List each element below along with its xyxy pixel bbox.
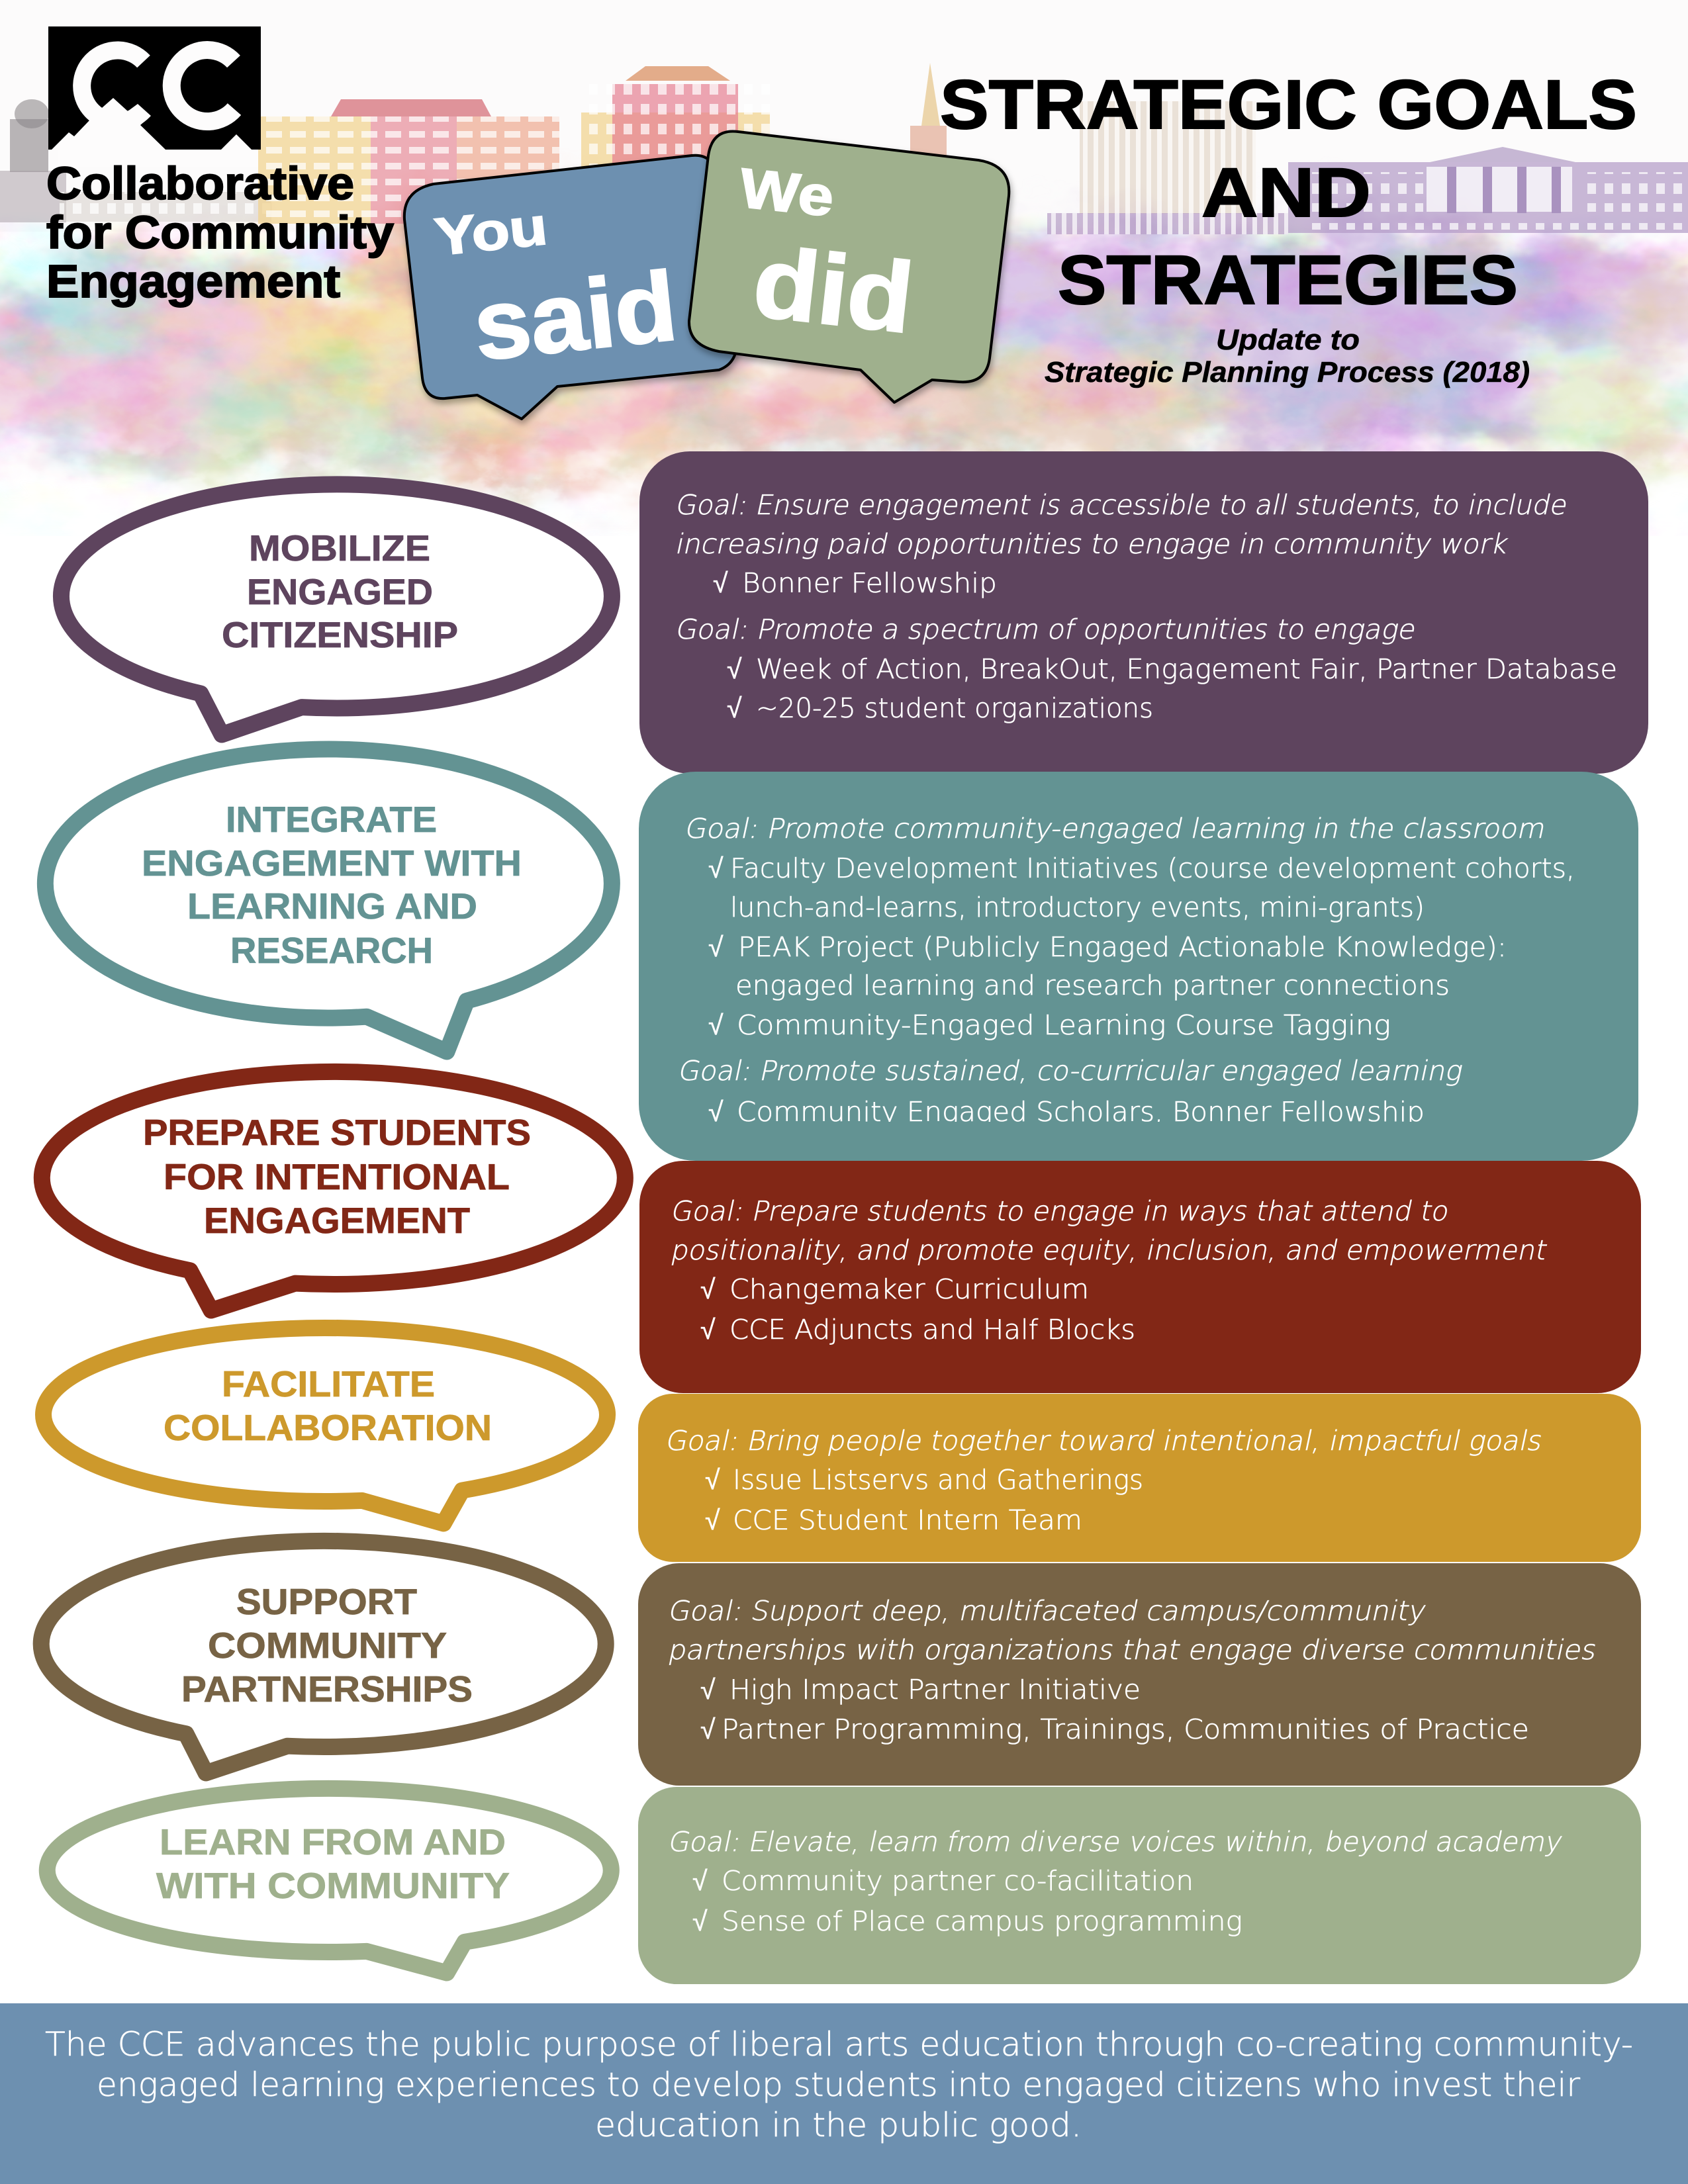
speech bubble: You said: You: [432, 197, 550, 267]
subtitle: [1045, 324, 1530, 388]
logo wordmark: [46, 158, 394, 307]
panel: integrate goals: √: [708, 852, 724, 884]
bubble: integrate engagement: INTEGRATE: [226, 799, 437, 840]
bubble: facilitate collaboration: COLLABORATION: [164, 1407, 492, 1448]
bubble: support community partnerships: COMMUNITY: [208, 1625, 447, 1666]
panel: facilitate goals: [638, 1394, 1641, 1562]
speech bubble: We did: We: [737, 156, 837, 228]
watercolor wash: [0, 218, 1688, 486]
bubble: support community partnerships: [41, 1541, 606, 1773]
bubble: prepare students: [42, 1071, 625, 1310]
panel: mobilize goals: Bonner Fellowship: [742, 567, 997, 599]
title: STRATEGIC GOALS: [940, 66, 1637, 144]
bubble: mobilize engaged citizenship: MOBILIZE: [249, 527, 430, 569]
title: [940, 66, 1637, 319]
panel: support goals: √: [700, 1713, 716, 1745]
logo wordmark: for Community: [46, 206, 394, 258]
panel: mobilize goals: √: [727, 653, 742, 685]
subtitle: Update to: [1216, 324, 1360, 356]
logo: [46, 26, 394, 307]
panel: support goals: High Impact Partner Initiative: [729, 1674, 1141, 1706]
bubble: prepare students: PREPARE STUDENTS: [143, 1112, 531, 1153]
bubble: facilitate collaboration: FACILITATE: [222, 1363, 435, 1404]
panel: learn goals: √: [692, 1865, 708, 1897]
speech bubble: We did: [689, 131, 1009, 402]
panel: prepare goals: Goal: Prepare students to engage in ways that attend to: [669, 1195, 1452, 1227]
panel: mobilize goals: Week of Action, BreakOut, Engagement Fair, Partner Database: [756, 653, 1617, 685]
panel: support goals: [638, 1563, 1641, 1786]
panel: integrate goals: Community-Engaged Learning Course Tagging: [737, 1009, 1391, 1041]
panel: integrate goals: [639, 772, 1638, 1161]
bubble: learn from community: WITH COMMUNITY: [156, 1865, 510, 1906]
bubble: prepare students: ENGAGEMENT: [204, 1200, 470, 1241]
panel: facilitate goals: Issue Listservs and Gatherings: [733, 1464, 1143, 1496]
panel: support goals: Goal: Support deep, multifaceted campus/community: [666, 1595, 1429, 1627]
multicolour paint mottling: [0, 220, 1688, 508]
panel: mobilize goals: √: [727, 692, 742, 724]
panel: prepare goals: Changemaker Curriculum: [729, 1273, 1089, 1305]
panel: integrate goals: Community Engaged Scholars, Bonner Fellowship: [737, 1096, 1425, 1128]
bubble: support community partnerships: PARTNERSHIPS: [181, 1668, 473, 1709]
bubble: prepare students: FOR INTENTIONAL: [164, 1156, 510, 1197]
bubble: mobilize engaged citizenship: CITIZENSHIP: [222, 614, 458, 655]
panel: learn goals: √: [692, 1905, 708, 1937]
panel: integrate goals: engaged learning and research partner connections: [735, 970, 1450, 1001]
panel: mobilize goals: √: [713, 567, 728, 599]
panel: integrate goals: Goal: Promote sustained, co-curricular engaged learning: [676, 1055, 1466, 1087]
speech bubble: We did: did: [748, 226, 919, 354]
panel: facilitate goals: √: [705, 1504, 720, 1536]
speech bubble: You said: said: [469, 251, 682, 381]
logo mark: [48, 26, 261, 167]
panel: integrate goals: √: [708, 1009, 724, 1041]
panel: integrate goals: Goal: Promote community-engaged learning in the classroom: [682, 813, 1549, 844]
bubble: mobilize engaged citizenship: [61, 484, 612, 735]
panel: integrate goals: lunch-and-learns, introductory events, mini-grants): [730, 891, 1425, 923]
bubble: learn from community: [47, 1789, 611, 1973]
panel: prepare goals: CCE Adjuncts and Half Blocks: [729, 1314, 1135, 1345]
watercolor and skyline background: [0, 63, 1688, 511]
speech bubble: You said: [404, 156, 737, 419]
footer mission statement: [0, 2003, 1688, 2184]
footer mission statement: engaged learning experiences to develop students into engaged citizens who invest their: [97, 2066, 1580, 2104]
panel: integrate goals: √: [708, 931, 724, 963]
bubble: integrate engagement: [45, 749, 612, 1052]
panel: integrate goals: √: [708, 1096, 724, 1128]
panel: mobilize goals: increasing paid opportunities to engage in community work: [673, 528, 1511, 560]
subtitle: Strategic Planning Process (2018): [1045, 356, 1530, 388]
panel: mobilize goals: Goal: Promote a spectrum of opportunities to engage: [673, 614, 1419, 645]
panel: mobilize goals: Goal: Ensure engagement is accessible to all students, to include: [673, 489, 1571, 521]
panel: integrate goals: Faculty Development Initiatives (course development cohorts,: [730, 852, 1575, 884]
title: AND: [1201, 154, 1371, 232]
bubble: support community partnerships: SUPPORT: [236, 1581, 417, 1622]
bubble: integrate engagement: ENGAGEMENT WITH: [142, 842, 522, 884]
panel: learn goals: Goal: Elevate, learn from diverse voices within, beyond academy: [666, 1826, 1566, 1858]
panel: prepare goals: positionality, and promote equity, inclusion, and empowerment: [669, 1234, 1550, 1266]
panel: mobilize goals: ~20-25 student organizations: [756, 692, 1153, 724]
panel: support goals: Partner Programming, Trainings, Communities of Practice: [722, 1713, 1529, 1745]
city skyline: [0, 63, 1688, 234]
panel: prepare goals: √: [700, 1273, 716, 1305]
bubble: integrate engagement: LEARNING AND: [187, 886, 477, 927]
panel: mobilize goals: [639, 451, 1648, 774]
panel: facilitate goals: √: [705, 1464, 720, 1496]
panel: integrate goals: PEAK Project (Publicly Engaged Actionable Knowledge):: [738, 931, 1507, 963]
logo wordmark: Collaborative: [46, 158, 354, 209]
footer mission statement: education in the public good.: [595, 2106, 1082, 2144]
bubble: mobilize engaged citizenship: ENGAGED: [247, 571, 433, 612]
panel: learn goals: Community partner co-facilitation: [722, 1865, 1194, 1897]
panel: learn goals: [638, 1787, 1641, 1984]
panel: support goals: √: [700, 1674, 716, 1706]
bubble: learn from community: LEARN FROM AND: [160, 1821, 506, 1862]
footer mission statement: The CCE advances the public purpose of liberal arts education through co-creating community-: [45, 2025, 1633, 2064]
white paint splatter fade: [70, 355, 1659, 506]
panel: prepare goals: √: [700, 1314, 716, 1345]
bubble: integrate engagement: RESEARCH: [230, 930, 433, 971]
panel: learn goals: Sense of Place campus programming: [722, 1905, 1243, 1937]
panel: support goals: partnerships with organizations that engage diverse communities: [666, 1634, 1600, 1666]
bubble: facilitate collaboration: [44, 1328, 608, 1524]
panel: facilitate goals: CCE Student Intern Team: [733, 1504, 1082, 1536]
logo wordmark: Engagement: [46, 255, 340, 307]
panel: facilitate goals: Goal: Bring people together toward intentional, impactful goals: [663, 1425, 1546, 1457]
panel: prepare goals: [639, 1161, 1641, 1393]
title: STRATEGIES: [1058, 242, 1518, 319]
